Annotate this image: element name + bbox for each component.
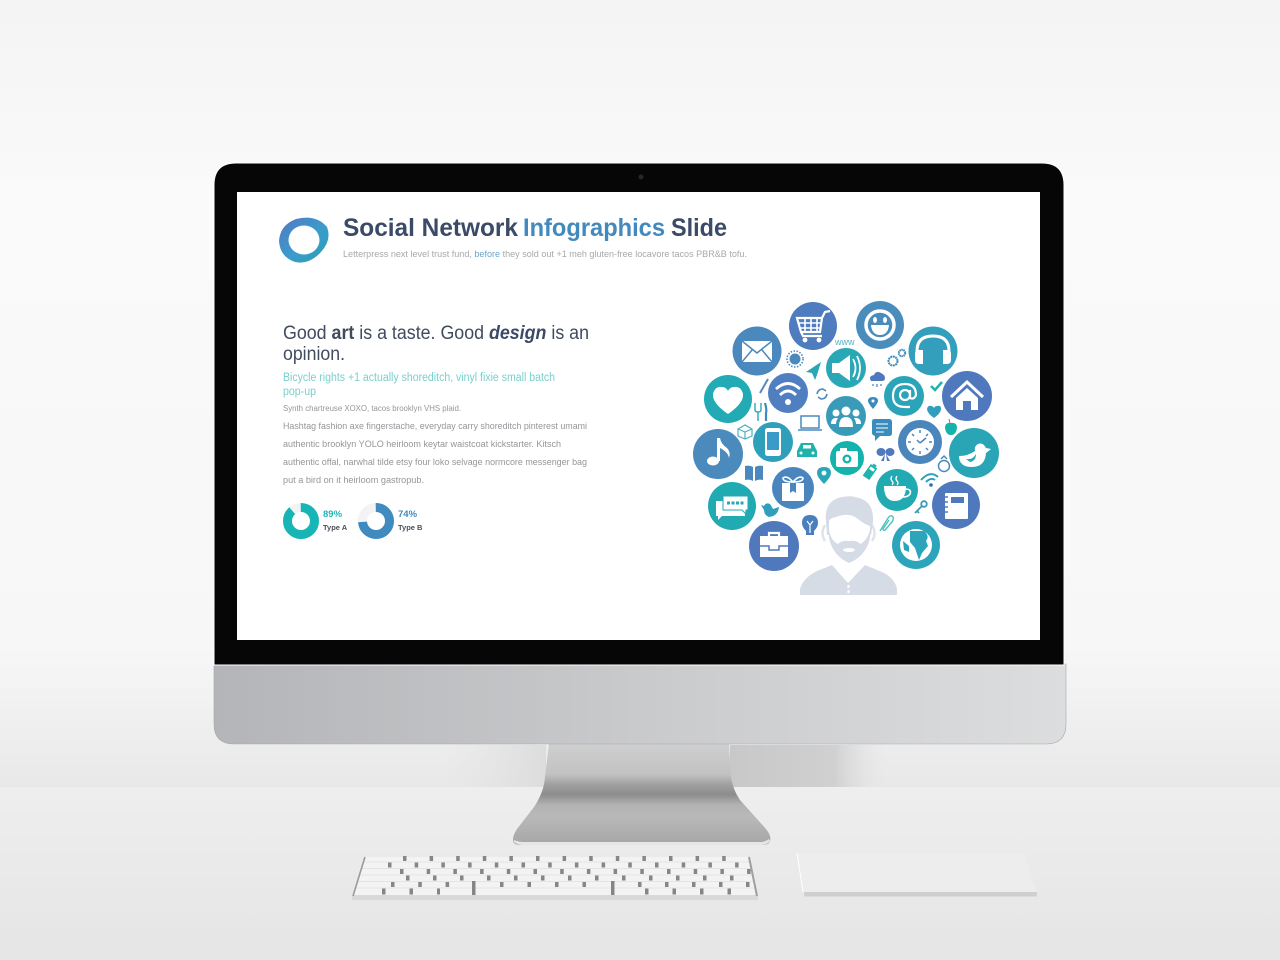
icon: clock	[898, 420, 942, 464]
person avatar	[800, 496, 897, 595]
icon: ring	[938, 456, 950, 472]
donut chart: Type A 89%: 89%	[323, 509, 343, 520]
social network icon cluster	[693, 301, 999, 595]
donut chart: Type B 74%	[362, 508, 423, 534]
icon: paper plane	[806, 362, 821, 380]
icon: wifi	[768, 373, 808, 413]
icon: phone	[753, 422, 793, 462]
logo ring	[279, 218, 329, 263]
icon: smile	[856, 301, 904, 349]
icon: battery	[863, 462, 878, 480]
icon: book	[745, 466, 763, 481]
icon: car	[797, 443, 817, 457]
icon: cloud rain	[870, 372, 885, 387]
title	[343, 214, 727, 242]
teal subheading: Bicycle rights +1 actually shoreditch, vinyl fixie small batch	[283, 372, 555, 384]
monitor chin	[214, 664, 1066, 744]
donut chart: Type B 74%: Type B	[398, 523, 423, 532]
icon: small wifi	[921, 474, 938, 487]
icon: notebook	[932, 481, 980, 529]
icon: speaker	[826, 348, 866, 388]
icon: pin blue	[868, 397, 878, 409]
person body	[800, 565, 897, 595]
icon: www label: www	[834, 337, 855, 347]
donut chart: Type A 89%	[288, 508, 348, 534]
icon: check	[931, 382, 942, 390]
icon: sync	[817, 389, 827, 399]
icon: globe	[892, 521, 940, 569]
screen	[237, 192, 1040, 640]
monitor stand	[513, 744, 770, 845]
icon: pin teal	[817, 467, 831, 484]
icon: group	[826, 396, 866, 436]
icon: music note	[693, 429, 743, 479]
body text: authentic brooklyn YOLO heirloom keytar waistcoat kickstarter. Kitsch	[283, 439, 561, 449]
teal subheading: pop-up	[283, 386, 316, 398]
small icons	[738, 337, 957, 535]
icon: twitter bird	[949, 428, 999, 478]
icon: home	[942, 371, 992, 421]
donut chart: Type B 74%: 74%	[398, 509, 418, 520]
title: Social Network	[343, 214, 518, 242]
person hair	[826, 496, 873, 535]
keyboard	[352, 857, 758, 900]
subtitle: Letterpress next level trust fund, before they sold out +1 meh gluten-free locavore tacos PBR&B tofu.	[343, 249, 747, 260]
icon: paperclip	[880, 516, 893, 531]
icon: box	[738, 425, 752, 439]
heading	[283, 323, 589, 365]
title: Slide	[671, 214, 727, 242]
icon: small heart	[927, 406, 941, 418]
icon: pencil	[760, 379, 768, 393]
icon: gift	[772, 467, 814, 509]
title: Infographics	[523, 214, 665, 242]
icon: camera	[830, 441, 864, 475]
icon: at sign	[884, 376, 924, 416]
heading: opinion.	[283, 344, 345, 365]
trackpad	[797, 853, 1037, 896]
icon: briefcase	[749, 521, 799, 571]
monitor bezel	[214, 163, 1064, 665]
icon: coffee	[876, 469, 918, 511]
icon: light bulb	[802, 515, 818, 535]
person buttons	[848, 585, 850, 593]
icon: butterfly	[876, 448, 894, 461]
heading: Good art is a taste. Good design is an	[283, 323, 589, 344]
icon: small bird	[761, 503, 779, 517]
icon: cart	[789, 302, 837, 350]
body text: Hashtag fashion axe fingerstache, everyday carry shoreditch pinterest umami	[283, 421, 587, 431]
icon: sun	[787, 351, 803, 367]
icon: chat	[708, 482, 756, 530]
body text: put a bird on it heirloom gastropub.	[283, 475, 424, 485]
body text: authentic offal, narwhal tilde etsy four loko selvage normcore messenger bag	[283, 457, 587, 467]
person beard	[829, 530, 870, 563]
icon: mail	[732, 326, 782, 376]
donut chart: Type A 89%: Type A	[323, 523, 348, 532]
webcam	[638, 174, 644, 180]
body text: Synth chartreuse XOXO, tacos brooklyn VHS plaid.	[283, 404, 461, 413]
body text	[283, 404, 587, 485]
icon: cutlery	[755, 403, 766, 421]
person face	[829, 515, 870, 560]
icon: heart	[704, 375, 752, 423]
icon: message	[872, 419, 892, 441]
monitor	[214, 163, 1066, 845]
teal subheading	[283, 372, 555, 398]
icon: apple	[945, 419, 957, 435]
icon: gears	[888, 350, 905, 366]
person ears	[822, 525, 874, 541]
icon: headphones	[908, 326, 958, 376]
icon: laptop	[798, 416, 822, 430]
icon: key	[915, 501, 927, 513]
